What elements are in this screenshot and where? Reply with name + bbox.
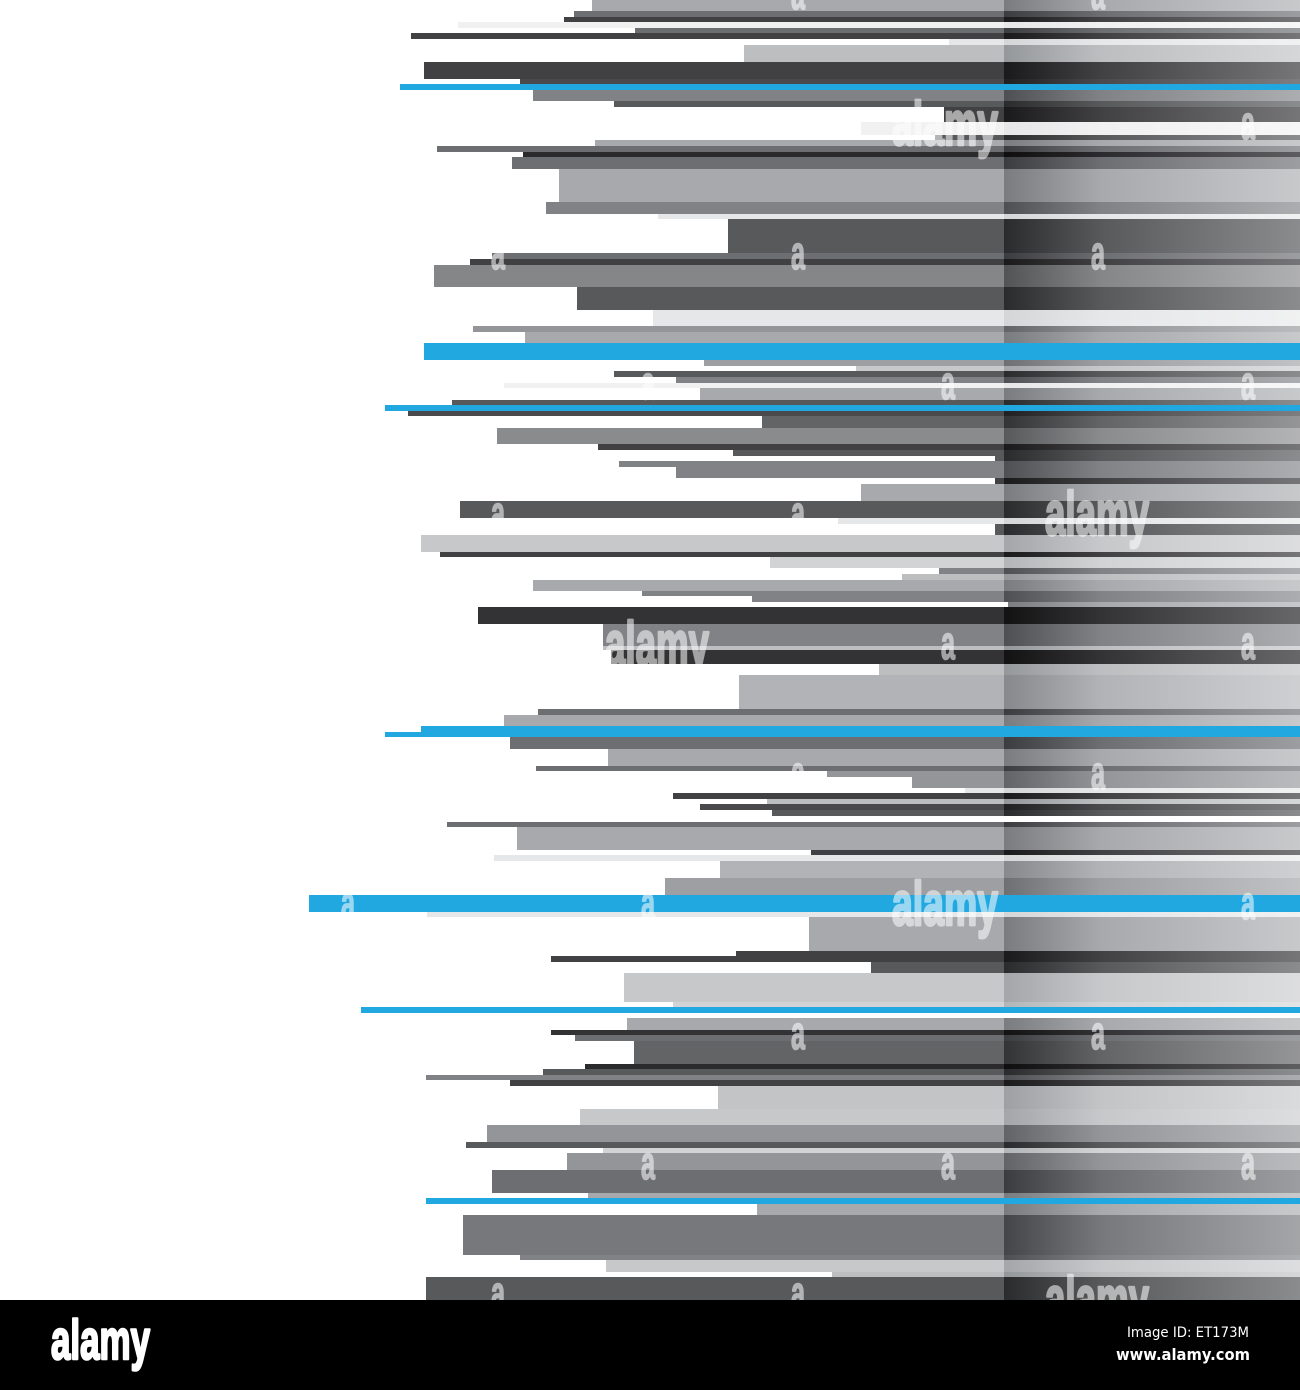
watermark: small repeated letters: a <box>941 356 955 409</box>
watermark: small repeated letters: a <box>791 746 805 799</box>
watermark: small repeated letters: a <box>641 356 655 409</box>
watermark: small repeated letters: a <box>1241 96 1255 149</box>
image id: Image ID: ET173M <box>1127 1325 1249 1341</box>
watermark: small repeated letters: a <box>791 1266 805 1319</box>
watermark: small repeated letters: a <box>791 1006 805 1059</box>
watermark: large logos: alamy <box>605 610 709 679</box>
website: www.alamy.com <box>1116 1345 1250 1364</box>
watermark: small repeated letters: a <box>791 486 805 539</box>
watermark: small repeated letters <box>341 0 1255 1319</box>
grey horizontal bars <box>408 0 1300 1300</box>
watermark: small repeated letters: a <box>941 1136 955 1189</box>
watermark: large logos: alamy <box>892 90 998 159</box>
blue accent bars <box>309 84 1300 1204</box>
watermark: small repeated letters: a <box>491 226 505 279</box>
watermark: small repeated letters: a <box>791 226 805 279</box>
watermark: small repeated letters: a <box>491 486 505 539</box>
footer logo: alamy <box>51 1308 150 1371</box>
footer bar <box>0 1300 1300 1390</box>
watermark: large logos: alamy <box>1045 480 1149 549</box>
right side shading band <box>1004 0 1300 1300</box>
watermark: small repeated letters: a <box>941 616 955 669</box>
watermark: large logos: alamy <box>1045 1265 1149 1334</box>
watermark: large logos: alamy <box>892 870 998 939</box>
watermark: small repeated letters: a <box>1091 1006 1105 1059</box>
watermark: small repeated letters: a <box>1241 356 1255 409</box>
watermark: small repeated letters: a <box>641 1136 655 1189</box>
watermark: small repeated letters: a <box>491 1266 505 1319</box>
watermark: small repeated letters: a <box>1091 226 1105 279</box>
watermark: small repeated letters: a <box>1241 876 1255 929</box>
watermark: large logos <box>605 90 1149 1334</box>
watermark: small repeated letters: a <box>1091 746 1105 799</box>
watermark: small repeated letters: a <box>341 876 355 929</box>
watermark: small repeated letters: a <box>1241 1136 1255 1189</box>
watermark: small repeated letters: a <box>641 876 655 929</box>
watermark: small repeated letters: a <box>1241 616 1255 669</box>
